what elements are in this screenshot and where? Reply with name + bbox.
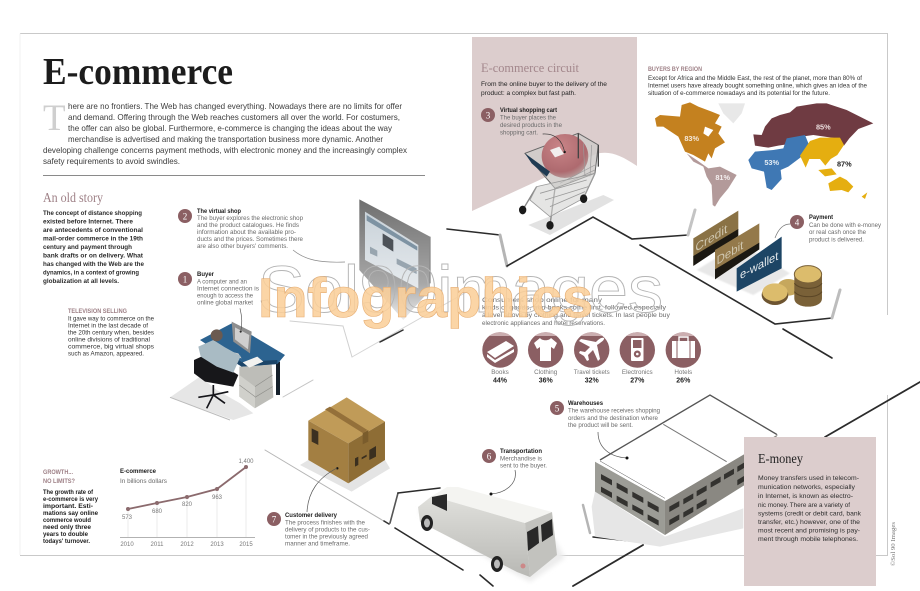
icon: books: 44% xyxy=(493,378,508,384)
step 4: payment: Payment xyxy=(809,214,833,221)
intro text block: developing challenge concerns payment methods, with electronic money and the increasingly complex xyxy=(43,146,407,155)
step 6: transportation: Transportation xyxy=(500,448,542,455)
step 4: payment: or real cash once the xyxy=(809,229,866,236)
text block: buyers by region xyxy=(648,66,867,97)
text block: television selling: It gave way to commerce on the xyxy=(68,316,154,322)
map region: north america xyxy=(655,102,725,162)
text block: an old story: existed before Internet. There xyxy=(43,218,133,226)
text block: television selling: such as Amazon, appeared. xyxy=(68,350,144,358)
step 7: customer delivery: delivery of products to the cus- xyxy=(285,526,370,534)
line chart: e-commerce in billions dollars xyxy=(120,459,255,548)
step 3 text: virtual shopping cart: desired products in the xyxy=(500,122,562,129)
world map: buyers by region xyxy=(655,102,873,207)
text block: growth no limits xyxy=(43,469,99,545)
step 1: buyer: Internet connection is xyxy=(197,286,259,292)
map region: greenland xyxy=(718,103,745,123)
step 2: the virtual shop: The buyer explores the electronic shop xyxy=(197,215,303,222)
panel: e-money: in Internet, is known as electro- xyxy=(758,493,853,500)
step 2: the virtual shop: The virtual shop xyxy=(197,208,241,215)
title: E-commerce xyxy=(43,51,233,93)
text block: an old story: bank drafts or on delivery. What xyxy=(43,252,144,260)
map region: africa and middle east xyxy=(748,135,809,190)
step 4: payment xyxy=(775,214,882,244)
step 3 text: virtual shopping cart: E-commerce circuit xyxy=(481,60,579,75)
panel: e-money: E-money xyxy=(758,452,803,467)
icon: electronics: Electronics xyxy=(622,369,653,376)
text block: buyers by region: BUYERS BY REGION xyxy=(648,66,702,73)
text block: an old story: century and payment through xyxy=(43,244,132,251)
step 6: transportation: 6 xyxy=(487,452,492,462)
step 3 text: virtual shopping cart xyxy=(481,60,607,136)
map region: asia pacific xyxy=(800,138,867,199)
line chart: e-commerce in billions dollars: 963 xyxy=(212,495,223,501)
line chart: e-commerce in billions dollars: 680 xyxy=(152,509,163,515)
text block: growth no limits: important. Esti- xyxy=(43,503,93,510)
step 7: customer delivery: tomer in the previously agreed xyxy=(285,534,368,540)
icon: electronics xyxy=(620,332,655,384)
text block: television selling: the 20th century when, besides xyxy=(68,330,155,336)
step 3 text: virtual shopping cart: Virtual shopping cart xyxy=(500,107,557,114)
step 2: the virtual shop: information about the available pro- xyxy=(197,229,296,236)
line chart: e-commerce in billions dollars: 2015 xyxy=(239,542,253,548)
text block: television selling: Internet in the last decade of xyxy=(68,322,148,330)
panel: e-money: munication networks, especially xyxy=(758,484,856,491)
line chart: e-commerce in billions dollars: In billions dollars xyxy=(120,478,167,485)
step 3 text: virtual shopping cart: From the online buyer to the delivery of the xyxy=(481,81,607,88)
step 7: customer delivery: The process finishes with the xyxy=(285,520,365,526)
icon: clothing xyxy=(528,332,563,384)
icon: electronics: 27% xyxy=(630,378,645,384)
step 7: customer delivery: Customer delivery xyxy=(285,512,338,519)
map percentages xyxy=(684,122,852,182)
illustration: buyer at desk xyxy=(170,308,285,420)
credit: ©Sol 90 Images xyxy=(890,521,897,566)
coins xyxy=(762,266,822,307)
text block: growth no limits: mations say online xyxy=(43,510,99,517)
step 1: buyer xyxy=(178,271,259,306)
text block: television selling: online divisions of traditional xyxy=(68,336,151,344)
icon: clothing: 36% xyxy=(539,378,553,384)
line chart: e-commerce in billions dollars: 1,400 xyxy=(238,459,254,465)
step 4: payment: Can be done with e-money xyxy=(809,222,882,229)
card: debit: Debit xyxy=(717,237,744,268)
illustration: cards and coins xyxy=(693,211,822,307)
intro text block: T xyxy=(43,98,66,139)
step 3 text: virtual shopping cart: The buyer places the xyxy=(500,114,556,122)
line chart: e-commerce in billions dollars: 2011 xyxy=(151,542,164,548)
text block: an old story: The concept of distance shopping xyxy=(43,210,142,217)
text block: television selling: TELEVISION SELLING xyxy=(68,308,127,315)
icon: clothing: Clothing xyxy=(534,369,558,376)
step 4: payment: 4 xyxy=(795,218,800,228)
panel: e-money: ment through mobile telephones. xyxy=(758,536,858,543)
step 2: the virtual shop: are also other buyers' comments. xyxy=(197,243,288,250)
step 5: warehouses: The warehouse receives shopping xyxy=(568,408,660,414)
intro text block: the offer can also be global. Furthermore, e-commerce is changing the ideas about the way xyxy=(68,124,393,133)
illustration: computer monitor xyxy=(359,199,430,320)
text block: buyers by region: Except for Africa and the Middle East, the rest of the planet, more than 80% of xyxy=(648,75,862,82)
step 2: the virtual shop: ducts and the prices. Sometimes there xyxy=(197,236,303,243)
step 6: transportation: Merchandise is xyxy=(500,456,542,462)
text block: an old story xyxy=(43,190,144,285)
text block: television selling xyxy=(68,308,155,358)
text block: an old story: mail-order commerce in the 19th xyxy=(43,236,143,242)
text block: an old story: are antecedents of conventional xyxy=(43,227,143,234)
line chart: e-commerce in billions dollars: 2013 xyxy=(210,542,224,548)
intro text block: here are no frontiers. The Web has changed everything. Nowadays there are no limits for offer xyxy=(68,102,402,111)
step 7: customer delivery: 7 xyxy=(272,514,277,524)
intro text block: safety requirements to avoid swindles. xyxy=(43,157,180,166)
step 6: transportation: sent to the buyer. xyxy=(500,462,547,470)
text block: television selling: commerce, big virtual shops xyxy=(68,344,155,350)
text block: most purchased products: Consumers shop online for many xyxy=(482,297,603,304)
step 5: warehouses: orders and the destination where xyxy=(568,415,658,422)
text block: an old story: An old story xyxy=(43,190,103,205)
text block: an old story: has changed with the Web are the xyxy=(43,261,144,268)
text block: most purchased products: kinds of goods, and books come first, followed especially xyxy=(482,304,667,312)
step 5: warehouses: Warehouses xyxy=(568,400,604,407)
circuit floor lines xyxy=(265,210,920,586)
warehouse windows xyxy=(601,463,744,526)
map percentages: 83% xyxy=(684,134,699,143)
text block: most purchased products: electronic appliances and hotel reservations. xyxy=(482,320,605,327)
step 1: buyer: Buyer xyxy=(197,271,215,278)
step 1: buyer: enough to access the xyxy=(197,292,253,300)
step 1: buyer: A computer and an xyxy=(197,278,247,286)
step 3 text: virtual shopping cart: 3 xyxy=(486,110,491,120)
icon: books xyxy=(482,332,518,384)
text block: most purchased products xyxy=(482,297,671,327)
step 4: payment: product is delivered. xyxy=(809,236,864,244)
illustration: cardboard box xyxy=(300,397,390,492)
step 5: warehouses xyxy=(550,400,660,460)
step 3 text: virtual shopping cart: product: a complex but fast path. xyxy=(481,90,576,97)
map region: europe and russia xyxy=(753,103,873,148)
intro text block: and demand. Offering through the Web reaches customers all over the world. For costumers, xyxy=(68,113,400,122)
panel: e-money: transfer, etc.) however, one of the xyxy=(758,519,860,526)
map percentages: 87% xyxy=(837,160,852,169)
text block: growth no limits: The growth rate of xyxy=(43,489,94,496)
icon: books: Books xyxy=(491,369,509,376)
panel: e-money: Money transfers used in telecom- xyxy=(758,475,859,482)
icon: hotels: Hotels xyxy=(674,369,692,376)
card: credit: Credit xyxy=(695,221,728,255)
map percentages: 85% xyxy=(816,122,831,131)
panel: e-money xyxy=(744,437,876,586)
step 1: buyer: 1 xyxy=(183,274,187,284)
illustration: delivery van xyxy=(418,487,565,582)
text block: growth no limits: GROWTH... xyxy=(43,469,73,476)
text block: growth no limits: years to double xyxy=(43,531,89,538)
text block: an old story: dynamics, in a context of growing xyxy=(43,270,139,276)
text block: growth no limits: NO LIMITS? xyxy=(43,478,75,485)
panel: e-money: systems (credit or debit card, bank xyxy=(758,510,862,518)
line chart: e-commerce in billions dollars: 2010 xyxy=(120,542,134,548)
icon: hotels: 26% xyxy=(676,378,691,384)
text block: growth no limits: todays' turnover. xyxy=(43,538,90,545)
step 1: buyer: online global market xyxy=(197,300,253,306)
map percentages: 53% xyxy=(764,158,779,167)
text block: most purchased products: a level above by clothing and travel tickets. In last people buy xyxy=(482,312,671,319)
line chart: e-commerce in billions dollars: 820 xyxy=(182,502,193,508)
illustration: warehouse xyxy=(592,395,777,547)
step 7: customer delivery: manner and timeframe. xyxy=(285,540,350,548)
text block: growth no limits: commerce would xyxy=(43,517,91,524)
text block: growth no limits: need only three xyxy=(43,524,92,531)
text block: buyers by region: situation of e-commerce nowadays and its potential for the future. xyxy=(648,90,830,97)
icon: travel tickets: Travel tickets xyxy=(574,369,610,376)
icon: travel tickets: 32% xyxy=(585,378,599,384)
text block: growth no limits: e-commerce is very xyxy=(43,496,99,503)
text block: an old story: globalization at all levels. xyxy=(43,278,119,285)
text block: buyers by region: Internet users have already bought something online, which gives an idea of the xyxy=(648,82,867,90)
step 3 text: virtual shopping cart: shopping cart. xyxy=(500,130,538,136)
illustration: shopping cart xyxy=(519,133,614,235)
step 5: warehouses: 5 xyxy=(555,404,560,414)
line chart: e-commerce in billions dollars: 2012 xyxy=(180,542,194,548)
line chart: e-commerce in billions dollars: 573 xyxy=(122,515,133,521)
map region: latin america xyxy=(687,153,737,207)
card: e-wallet: e-wallet xyxy=(740,248,779,282)
icon: hotels xyxy=(666,332,701,384)
step 5: warehouses: the product will be sent. xyxy=(568,422,633,429)
map percentages: 81% xyxy=(715,173,730,182)
panel: e-commerce circuit background xyxy=(472,37,637,211)
watermark: sol90images outline: Sol90images xyxy=(258,252,663,326)
panel: e-money: nic money. There are a variety of xyxy=(758,502,850,509)
step 2: the virtual shop: and the product catalogues. He finds xyxy=(197,222,299,229)
intro text block: merchandise is advertised and making the transportation business more dynamic. Another xyxy=(68,135,383,144)
watermark: infographics: Infographics xyxy=(258,266,593,329)
icon: travel tickets xyxy=(574,332,610,384)
step 7: customer delivery xyxy=(267,468,370,548)
step 2: the virtual shop xyxy=(178,208,345,262)
line chart: e-commerce in billions dollars: E-commerce xyxy=(120,468,157,475)
step 6: transportation xyxy=(482,448,547,496)
intro text block xyxy=(43,98,407,166)
step 2: the virtual shop: 2 xyxy=(183,212,187,222)
panel: e-money: most recent and promising is pay- xyxy=(758,528,860,534)
